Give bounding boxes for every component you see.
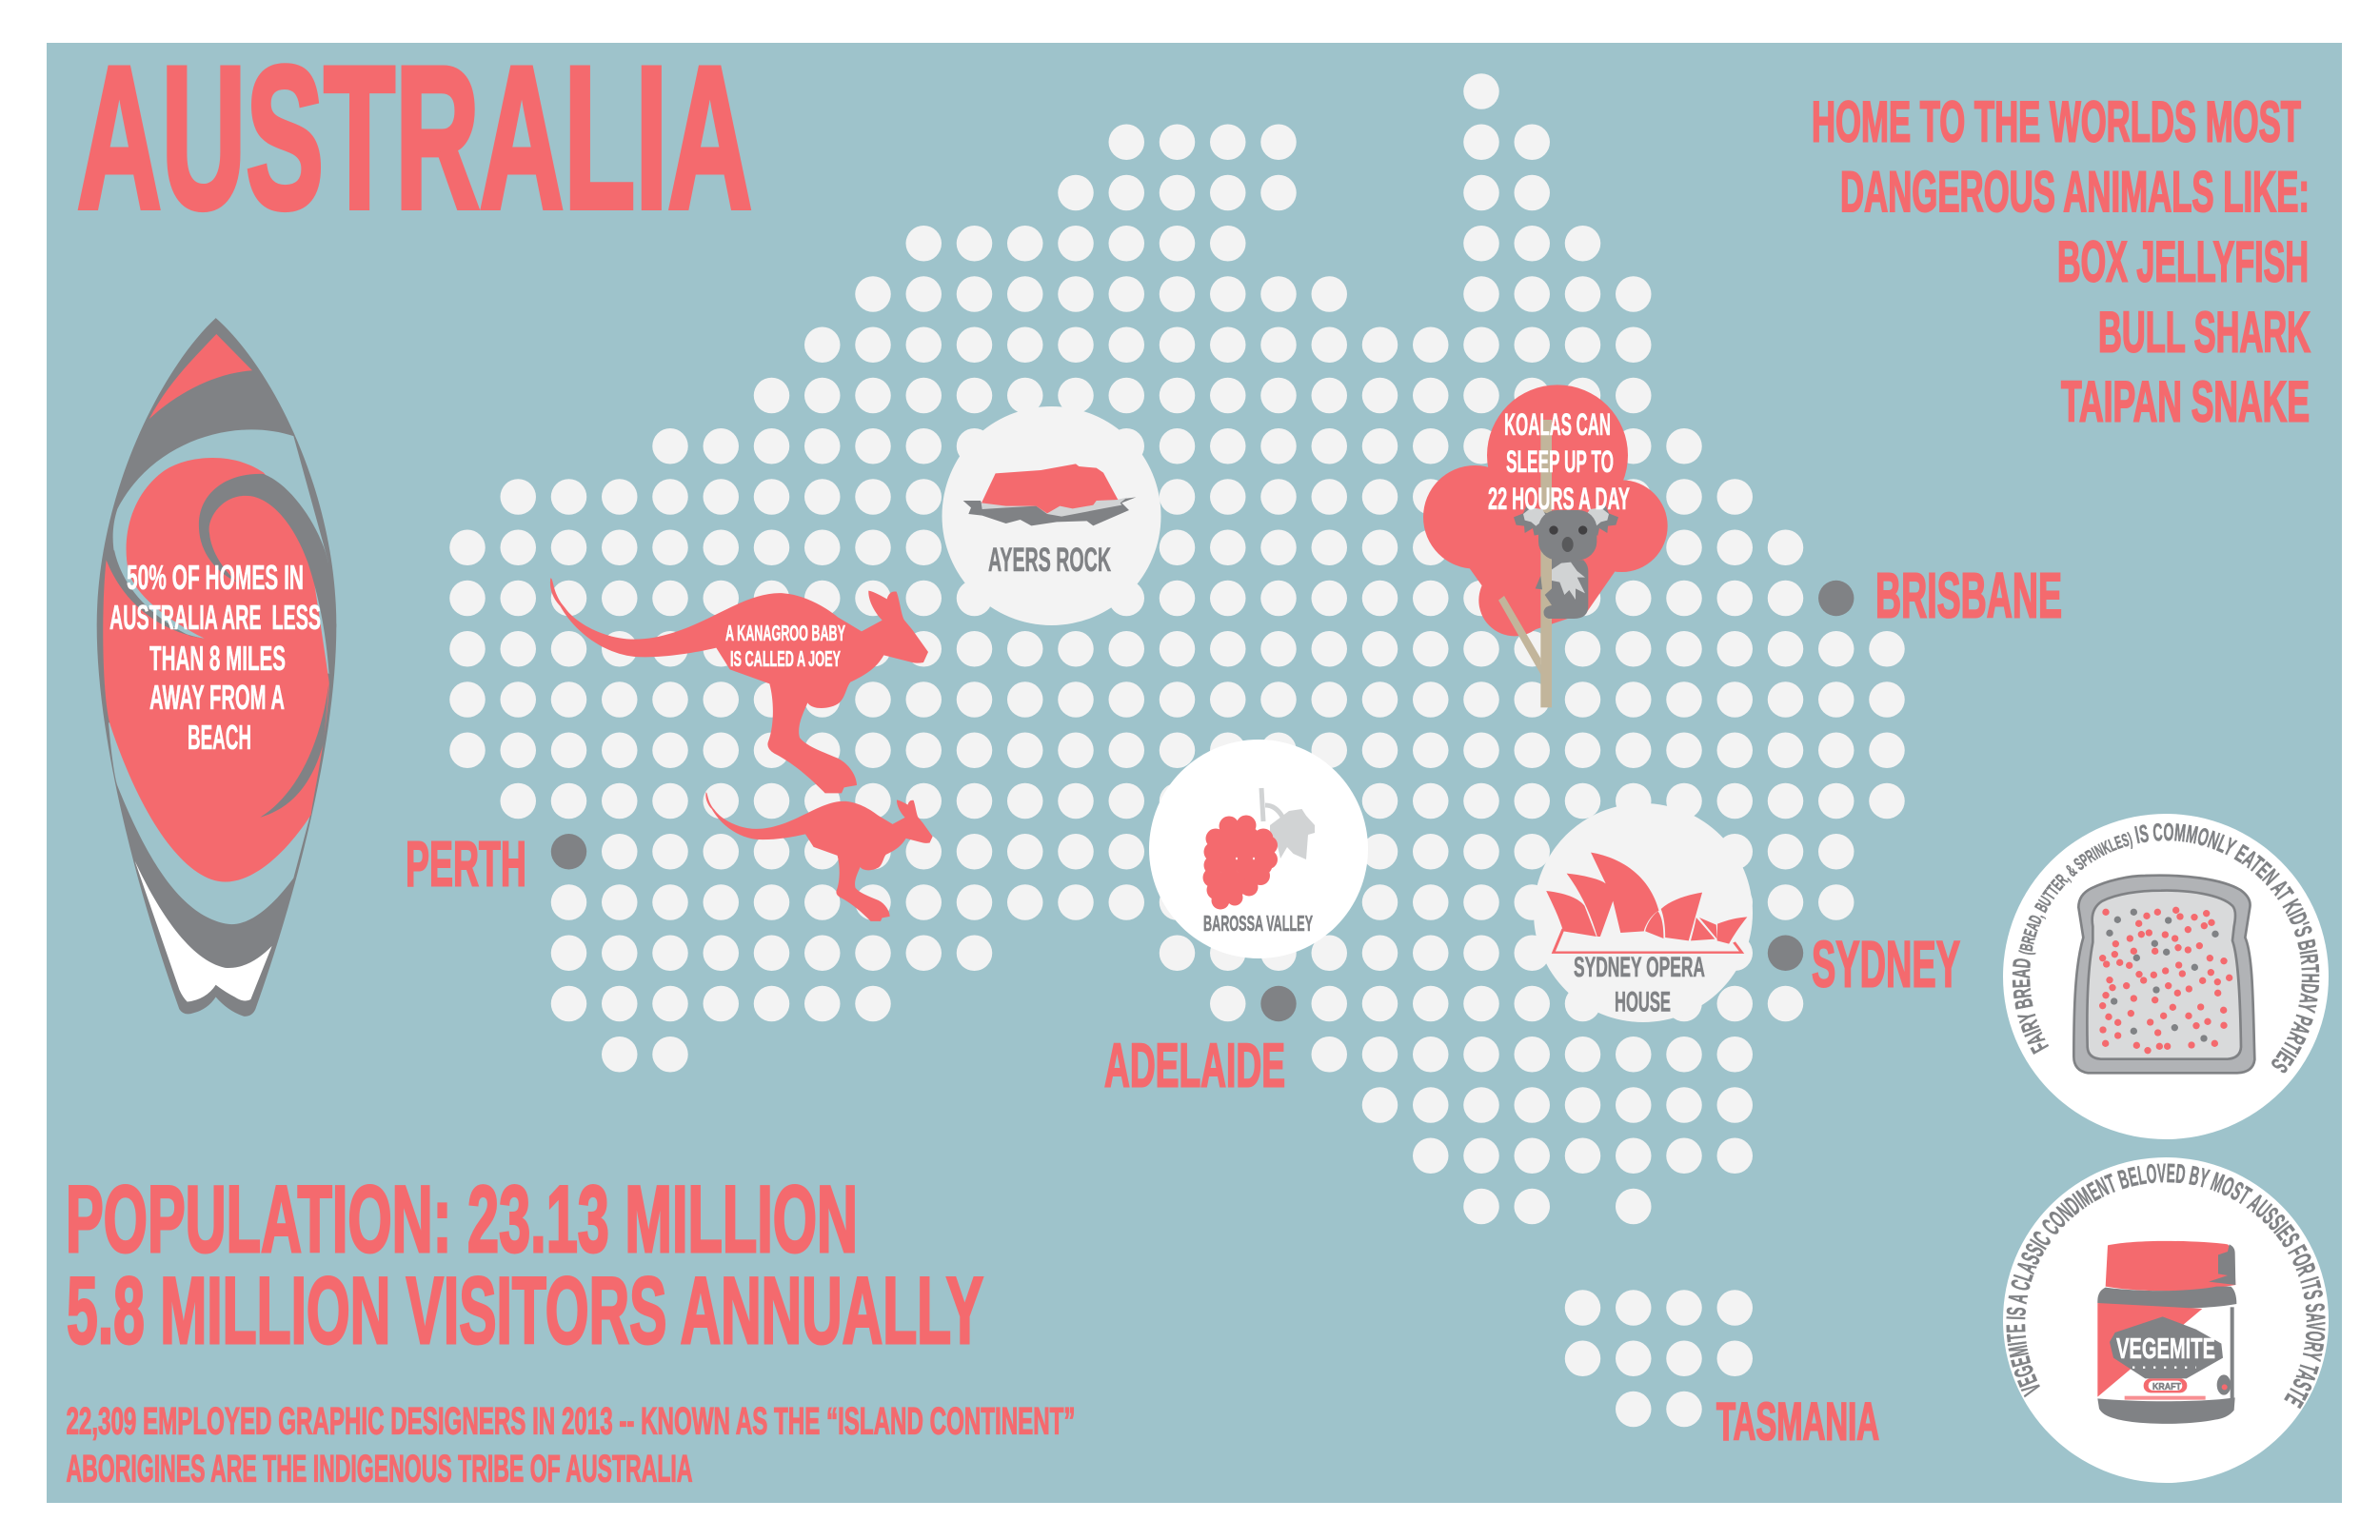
- surfboard caption: BEACH: [188, 718, 251, 757]
- dot map of Australia: [467, 91, 1888, 1409]
- fairy bread badge: [2003, 814, 2329, 1139]
- surfboard: [97, 318, 336, 1017]
- jar label: [2116, 1332, 2215, 1392]
- fact: aborigines: ABORIGINES ARE THE INDIGENOUS TRIBE OF AUSTRALIA: [67, 1449, 693, 1491]
- city label: Sydney: SYDNEY: [1812, 927, 1960, 1001]
- kangaroo caption: IS CALLED A JOEY: [730, 646, 841, 671]
- large kangaroo: [550, 578, 928, 793]
- dangerous animals list: [1812, 89, 2311, 434]
- small kangaroo: [705, 792, 933, 921]
- surfboard caption: AUSTRALIA ARE LESS: [109, 598, 321, 637]
- population headline: POPULATION: 23.13 MILLION: [66, 1166, 858, 1272]
- icon: koala: [1514, 506, 1618, 619]
- icon: opera house: [1546, 853, 1747, 953]
- icon: vegemite jar: [2097, 1241, 2236, 1424]
- koala caption: [1488, 407, 1630, 516]
- icon: fairy bread: [2073, 876, 2254, 1073]
- curved caption: vegemite: VEGEMITE IS A CLASSIC CONDIMENT BELOVED BY MOST AUSSIES FOR ITS SAVORY TASTE: [2006, 1163, 2325, 1409]
- city label: Brisbane: BRISBANE: [1875, 560, 2062, 632]
- Barossa Valley badge: [1149, 740, 1368, 958]
- surfboard caption: THAN 8 MILES: [149, 639, 286, 678]
- city label: Adelaide: ADELAIDE: [1104, 1030, 1285, 1100]
- label: Sydney Opera House: SYDNEY OPERA: [1574, 952, 1705, 983]
- region label: Tasmania: TASMANIA: [1716, 1392, 1879, 1451]
- koala caption: SLEEP UP TO: [1506, 444, 1614, 479]
- kangaroo caption: [725, 621, 845, 671]
- label: Barossa Valley: BAROSSA VALLEY: [1203, 911, 1313, 936]
- koala tree: [1423, 385, 1668, 707]
- koala caption: KOALAS CAN: [1504, 407, 1611, 442]
- tree crown and trunk: [1423, 385, 1668, 707]
- label: Sydney Opera House: [1574, 952, 1705, 1018]
- icon: grapes: [1203, 788, 1315, 910]
- title: AUSTRALIA: [77, 25, 752, 251]
- surfboard caption: 50% OF HOMES IN: [127, 558, 304, 597]
- jar label: KRAFT: [2152, 1382, 2181, 1392]
- visitors headline: 5.8 MILLION VISITORS ANNUALLY: [67, 1257, 983, 1363]
- vegemite badge: [2003, 1157, 2329, 1483]
- kangaroo caption: A KANAGROO BABY: [725, 621, 845, 645]
- label: Ayers Rock: AYERS ROCK: [988, 542, 1111, 579]
- Sydney Opera House badge: [1534, 803, 1753, 1022]
- icon: Ayers Rock: [963, 464, 1136, 525]
- surfboard caption: [109, 558, 321, 757]
- jar label: VEGEMITE: [2116, 1332, 2215, 1365]
- city markers: [551, 581, 1854, 1021]
- Ayers Rock badge: [942, 406, 1161, 625]
- koala caption: 22 HOURS A DAY: [1488, 482, 1630, 516]
- fact: graphic designers: 22,309 EMPLOYED GRAPHIC DESIGNERS IN 2013 -- KNOWN AS THE “ISLAND CONTINENT”: [67, 1401, 1076, 1443]
- curved caption: fairy bread: FAIRY BREAD (BREAD, BUTTER, & SPRINKLES) IS COMMONLY EATEN AT KID'S BIRTHDAY PARTIES: [2013, 822, 2319, 1074]
- surfboard caption: AWAY FROM A: [149, 678, 285, 717]
- city label: Perth: PERTH: [406, 828, 526, 900]
- label: Sydney Opera House: HOUSE: [1615, 986, 1671, 1018]
